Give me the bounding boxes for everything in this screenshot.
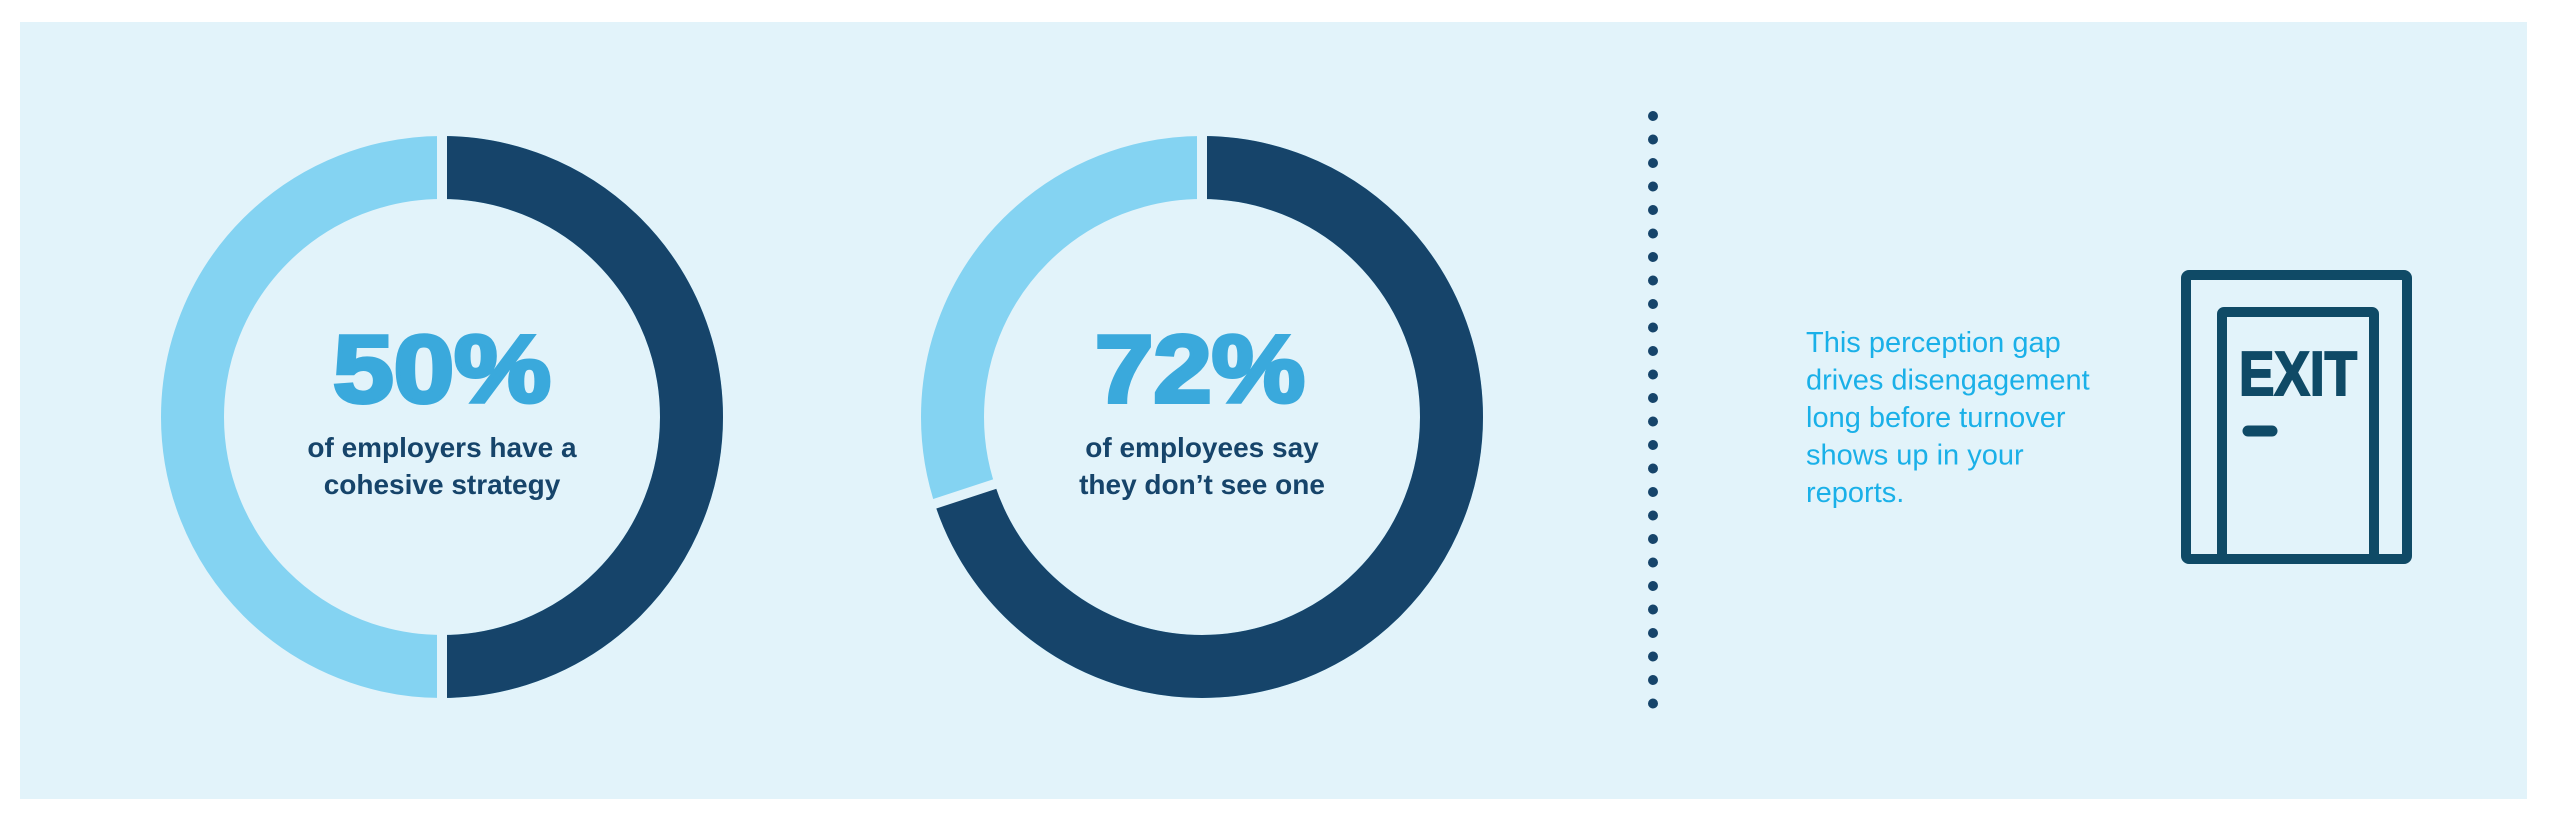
- donut chart: 72% employees: they don’t see one: [1079, 469, 1325, 500]
- donut chart: 72% employees: [931, 130, 1452, 666]
- text block: perception gap: reports.: [1806, 477, 1904, 509]
- text block: perception gap: This perception gap: [1806, 327, 2061, 359]
- dotted divider: [1648, 111, 1658, 708]
- text block: perception gap: shows up in your: [1806, 440, 2024, 472]
- donut chart: 50% employers: [192, 130, 692, 704]
- caption: employers: of employers have a: [307, 432, 577, 463]
- donut chart: 50% employers: cohesive strategy: [324, 469, 561, 500]
- text block: perception gap: drives disengagement: [1806, 364, 2090, 396]
- stat: 72%: 72%: [1095, 316, 1305, 423]
- stat: 50%: 50%: [333, 316, 551, 423]
- text block: perception gap: long before turnover: [1806, 402, 2066, 434]
- caption: employees: of employees say: [1085, 432, 1319, 463]
- icon: exit door: [2186, 275, 2407, 559]
- icon: exit door: EXIT: [2239, 340, 2357, 409]
- text block: perception gap: [1806, 327, 2090, 509]
